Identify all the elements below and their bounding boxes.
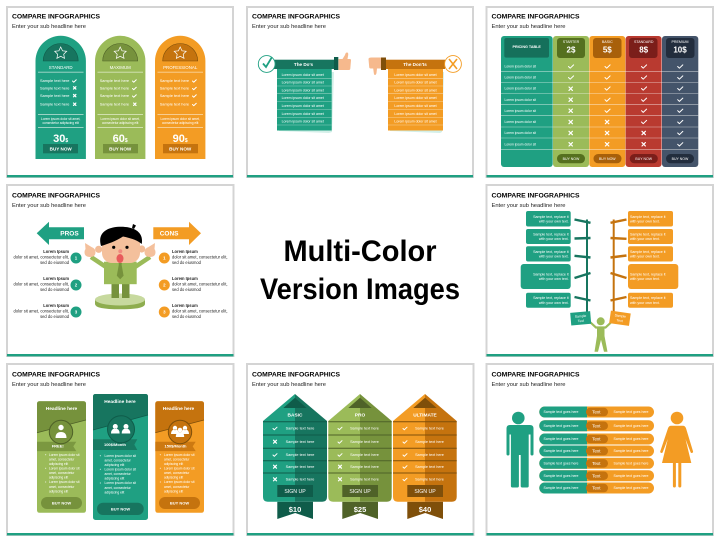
left text boxes: with your own text. bbox=[539, 277, 569, 281]
card: monthly group: adipiscing elit bbox=[164, 462, 183, 466]
subtitle: Enter your sub headline here bbox=[492, 203, 566, 209]
plan: standard bbox=[36, 36, 86, 159]
pros list: sed do eiusmod bbox=[40, 287, 70, 292]
left text boxes: Sample text, replace it bbox=[533, 272, 569, 276]
do's list: Lorem ipsum dolor sit amet bbox=[282, 112, 324, 116]
icon: man bbox=[507, 412, 534, 488]
column: basic: 5$ bbox=[603, 46, 612, 54]
card: monthly team: Lorem ipsum dolor sit bbox=[104, 481, 136, 485]
plan: pro: PRO bbox=[355, 412, 365, 418]
icon: cross circle bbox=[445, 56, 461, 72]
center caption bbox=[260, 235, 460, 306]
cons list bbox=[159, 249, 228, 319]
plan: basic bbox=[263, 394, 327, 519]
plan: professional: consectetur adipiscing elit bbox=[162, 121, 199, 125]
plan: maximum: Lorem ipsum dolor sit amet, bbox=[101, 117, 140, 121]
plan: standard: Sample text here bbox=[40, 93, 69, 98]
plan: professional: Sample text here bbox=[160, 102, 189, 107]
plan: basic: Sample text here bbox=[286, 478, 314, 482]
pros list: dolor sit amet, consectetur elit, bbox=[13, 282, 69, 287]
card: monthly group bbox=[155, 401, 204, 513]
card: free: BUY NOW bbox=[52, 500, 71, 506]
card: monthly group: 150$/Month bbox=[164, 444, 187, 449]
pros list: dolor sit amet, consectetur elit, bbox=[13, 255, 69, 260]
cons list: sed do eiusmod bbox=[172, 260, 202, 265]
comparison bars: Text bbox=[592, 486, 601, 491]
plan: standard: 30$ bbox=[53, 133, 68, 145]
left text boxes: Sample text, replace it bbox=[533, 232, 569, 236]
column: labels: Lorem ipsum dolor sit bbox=[504, 86, 536, 90]
left signpost bbox=[574, 220, 590, 314]
card: monthly team: adipiscing elit bbox=[104, 476, 124, 480]
center caption: Multi-Color bbox=[284, 235, 437, 268]
column: premium: BUY NOW bbox=[672, 157, 689, 161]
card: monthly group: BUY NOW bbox=[170, 500, 189, 506]
panel: arched pricing plans bbox=[7, 7, 233, 177]
card: monthly group: Lorem ipsum dolor sit bbox=[164, 480, 195, 484]
column: premium: 10$ bbox=[673, 46, 687, 54]
comparison bars: Sample text goes here bbox=[543, 424, 579, 428]
column: labels: Lorem ipsum dolor sit bbox=[504, 109, 536, 113]
plan: professional: PROFESSIONAL bbox=[163, 65, 198, 70]
column: labels: Lorem ipsum dolor sit bbox=[504, 142, 536, 146]
pros list: Lorem Ipsum bbox=[43, 303, 69, 308]
comparison bars: Sample text goes here bbox=[613, 437, 649, 441]
card: monthly team: Lorem ipsum dolor sit bbox=[104, 454, 136, 458]
plan: standard: BUY NOW bbox=[50, 146, 72, 151]
plan: ultimate bbox=[393, 394, 457, 519]
comparison bars: Text bbox=[592, 410, 601, 415]
center caption: Version Images bbox=[260, 273, 460, 306]
do's list: Lorem ipsum dolor sit amet bbox=[282, 96, 324, 100]
cons list: 3 bbox=[163, 310, 166, 315]
plan: standard: Sample text here bbox=[40, 78, 69, 83]
pros list: 1 bbox=[75, 256, 78, 261]
card: monthly team: BUY NOW bbox=[111, 506, 130, 511]
plan: maximum: consectetur adipiscing elit bbox=[102, 121, 139, 125]
plan: standard: STANDARD bbox=[49, 65, 73, 70]
left text boxes: Sample text, replace it bbox=[533, 250, 569, 254]
plan: professional: 90$ bbox=[173, 133, 188, 145]
plan: professional: Sample text here bbox=[160, 78, 189, 83]
plan: basic: Sample text here bbox=[286, 440, 314, 444]
plan: standard: Sample text here bbox=[40, 86, 69, 90]
comparison bars: Sample text goes here bbox=[613, 424, 649, 428]
pros list: sed do eiusmod bbox=[40, 314, 70, 319]
card: monthly team: Lorem ipsum dolor sit bbox=[104, 467, 136, 471]
column: premium bbox=[662, 36, 698, 167]
card: monthly group: adipiscing elit bbox=[164, 475, 183, 479]
card: monthly team: adipiscing elit bbox=[104, 490, 124, 494]
left text boxes: with your own text. bbox=[539, 301, 569, 305]
card: free: amet, consectetur bbox=[49, 457, 75, 461]
cons list: 2 bbox=[163, 283, 166, 288]
right sign: Text bbox=[616, 318, 623, 323]
column: basic: BASIC bbox=[602, 40, 613, 44]
card: free: Lorem ipsum dolor sit bbox=[49, 480, 80, 484]
cons list: sed do eiusmod bbox=[172, 314, 202, 319]
do's list: Lorem ipsum dolor sit amet bbox=[282, 81, 324, 85]
column: labels bbox=[501, 36, 553, 167]
cons list: dolor sit amet, consectetur elit, bbox=[172, 309, 228, 314]
column: standard: STANDARD bbox=[634, 40, 654, 44]
plan: ultimate: Sample text here bbox=[415, 478, 444, 482]
card: monthly group: Lorem ipsum dolor sit bbox=[164, 453, 195, 457]
panel: do's and don'ts bbox=[247, 7, 473, 177]
subtitle: Enter your sub headline here bbox=[492, 382, 566, 388]
don'ts list: Lorem ipsum dolor sit amet bbox=[394, 96, 437, 100]
plan: basic: Sample text here bbox=[286, 453, 314, 457]
comparison bars: Sample text goes here bbox=[613, 410, 649, 414]
cartoon person on podium bbox=[84, 224, 156, 309]
plan: maximum: Sample text here bbox=[100, 93, 129, 98]
plan: professional: BUY NOW bbox=[169, 146, 192, 151]
pros list: 3 bbox=[75, 310, 78, 315]
title: COMPARE INFOGRAPHICS bbox=[492, 371, 580, 378]
column: starter: 2$ bbox=[567, 46, 576, 54]
plan: basic: SIGN UP bbox=[284, 489, 306, 495]
comparison bars: Sample text goes here bbox=[613, 486, 649, 490]
card: monthly team bbox=[93, 394, 148, 520]
plan: maximum: 60$ bbox=[113, 133, 128, 145]
plan: maximum: Sample text here bbox=[100, 102, 129, 107]
plan: ultimate: Sample text here bbox=[415, 453, 444, 457]
column: standard bbox=[626, 36, 662, 167]
right text boxes: Sample text, replace it bbox=[630, 272, 666, 276]
subtitle: Enter your sub headline here bbox=[12, 203, 86, 209]
arrow: pros bbox=[37, 222, 84, 245]
title: COMPARE INFOGRAPHICS bbox=[12, 192, 101, 199]
right signpost bbox=[610, 220, 626, 314]
plan: pro: $25 bbox=[354, 505, 366, 514]
icon: thumb up bbox=[338, 52, 351, 70]
comparison bars: Sample text goes here bbox=[543, 486, 579, 490]
column: starter: BUY NOW bbox=[563, 157, 580, 161]
don'ts list: Lorem ipsum dolor sit amet bbox=[394, 120, 437, 124]
plan: maximum: Sample text here bbox=[100, 86, 129, 90]
column: labels: Lorem ipsum dolor sit bbox=[504, 131, 536, 135]
do's list bbox=[258, 52, 351, 133]
plan: ultimate: Sample text here bbox=[415, 427, 444, 431]
plan: professional: Lorem ipsum dolor sit amet, bbox=[161, 117, 200, 121]
icon: check circle bbox=[258, 56, 275, 72]
do's list: The Do's bbox=[294, 62, 314, 67]
column: basic: BUY NOW bbox=[599, 157, 616, 161]
panel: signpost comparison bbox=[486, 185, 713, 356]
panel: headline plan cards bbox=[7, 364, 234, 535]
right text boxes: with your own text. bbox=[630, 277, 660, 281]
comparison bars: Sample text goes here bbox=[543, 437, 579, 441]
pros list: sed do eiusmod bbox=[40, 260, 70, 265]
card: free: FREE! bbox=[52, 444, 64, 449]
comparison bars: Text bbox=[592, 473, 601, 478]
do's list: Lorem ipsum dolor sit amet bbox=[282, 73, 324, 77]
cons list: Lorem Ipsum bbox=[172, 303, 198, 308]
card: monthly group: Lorem ipsum dolor sit bbox=[164, 466, 195, 470]
title: COMPARE INFOGRAPHICS bbox=[492, 192, 580, 199]
subtitle: Enter your sub headline here bbox=[252, 382, 326, 388]
right text boxes bbox=[628, 211, 678, 308]
comparison bars: Sample text goes here bbox=[613, 474, 649, 478]
don'ts list: Lorem ipsum dolor sit amet bbox=[394, 81, 437, 85]
subtitle: Enter your sub headline here bbox=[12, 382, 86, 388]
plan: basic: BASIC bbox=[288, 412, 303, 418]
plan: ultimate: $40 bbox=[419, 505, 431, 514]
column: basic bbox=[589, 36, 625, 167]
right text boxes: Sample text, replace it bbox=[630, 215, 666, 219]
column: starter bbox=[553, 36, 589, 167]
panel: house-shaped plans bbox=[247, 364, 474, 535]
card: free: amet, consectetur bbox=[49, 485, 75, 489]
right text boxes: Sample text, replace it bbox=[630, 250, 666, 254]
plan: ultimate: ULTIMATE bbox=[413, 412, 438, 418]
card: monthly group: amet, consectetur bbox=[164, 457, 190, 461]
pros list: Lorem Ipsum bbox=[43, 276, 69, 281]
card: monthly team: adipiscing elit bbox=[104, 463, 124, 467]
plan: pro: Sample text here bbox=[350, 465, 379, 469]
card: monthly team: 100$/Month bbox=[104, 442, 127, 447]
plan: maximum: BUY NOW bbox=[109, 146, 132, 151]
card: free: adipiscing elit bbox=[49, 462, 68, 466]
don'ts list: Lorem ipsum dolor sit amet bbox=[394, 104, 437, 108]
left text boxes: Sample text, replace it bbox=[533, 296, 569, 300]
do's list: Lorem ipsum dolor sit amet bbox=[282, 104, 324, 108]
plan: ultimate: Sample text here bbox=[415, 440, 444, 444]
plan: pro: Sample text here bbox=[350, 453, 379, 457]
card: monthly team: amet, consectetur bbox=[104, 458, 132, 462]
do's list: Lorem ipsum dolor sit amet bbox=[282, 120, 324, 124]
left sign: Sample bbox=[575, 314, 587, 319]
card: free: adipiscing elit bbox=[49, 489, 68, 493]
comparison bars: Text bbox=[592, 461, 601, 466]
don'ts list: The Don'ts bbox=[403, 62, 427, 67]
left text boxes: with your own text. bbox=[539, 255, 569, 259]
card: free: Lorem ipsum dolor sit bbox=[49, 453, 80, 457]
left sign: Text bbox=[578, 319, 584, 323]
column: premium: PREMIUM bbox=[672, 40, 688, 44]
plan: ultimate: SIGN UP bbox=[414, 489, 436, 495]
card: monthly group: adipiscing elit bbox=[164, 489, 183, 493]
plan: basic: Sample text here bbox=[286, 427, 314, 431]
do's list: Lorem ipsum dolor sit amet bbox=[282, 88, 324, 92]
cons list: sed do eiusmod bbox=[172, 287, 202, 292]
cons list: 1 bbox=[163, 256, 166, 261]
plan: professional: Sample text here bbox=[160, 93, 189, 98]
left text boxes: with your own text. bbox=[539, 220, 569, 224]
don'ts list: Lorem ipsum dolor sit amet bbox=[394, 73, 437, 77]
plan: maximum: MAXIMUM bbox=[110, 65, 131, 70]
title: COMPARE INFOGRAPHICS bbox=[252, 13, 341, 20]
card: free: adipiscing elit bbox=[49, 475, 68, 479]
don'ts list: Lorem ipsum dolor sit amet bbox=[394, 88, 437, 92]
card: free bbox=[37, 401, 86, 513]
card: free: Headline here bbox=[46, 406, 78, 412]
title: COMPARE INFOGRAPHICS bbox=[12, 13, 101, 20]
cons list: dolor sit amet, consectetur elit, bbox=[172, 282, 228, 287]
figure holding signs bbox=[570, 311, 631, 352]
panel: man vs woman bbox=[486, 364, 713, 535]
plan: standard: Lorem ipsum dolor sit amet, bbox=[41, 117, 80, 121]
column: labels: Lorem ipsum dolor sit bbox=[504, 76, 536, 80]
comparison bars: Sample text goes here bbox=[543, 410, 579, 414]
column: starter: STARTER bbox=[563, 40, 580, 44]
card: monthly group: Headline here bbox=[163, 406, 195, 412]
arrow: cons bbox=[153, 222, 201, 245]
comparison bars: Text bbox=[592, 437, 601, 442]
column: labels: Lorem ipsum dolor sit bbox=[504, 64, 536, 68]
don'ts list bbox=[368, 56, 461, 133]
panel: pros and cons bbox=[7, 185, 234, 356]
plan: basic: Sample text here bbox=[286, 465, 314, 469]
comparison bars bbox=[539, 406, 654, 494]
subtitle: Enter your sub headline here bbox=[12, 24, 86, 30]
comparison bars: Sample text goes here bbox=[613, 462, 649, 466]
left text boxes: with your own text. bbox=[539, 237, 569, 241]
cons list: dolor sit amet, consectetur elit, bbox=[172, 255, 228, 260]
plan: maximum: Sample text here bbox=[100, 78, 129, 83]
comparison bars: Text bbox=[592, 423, 601, 428]
plan: pro: Sample text here bbox=[350, 478, 379, 482]
column: standard: 8$ bbox=[639, 46, 649, 54]
plan: ultimate: Sample text here bbox=[415, 465, 444, 469]
card: monthly team: Headline here bbox=[104, 399, 136, 405]
right text boxes: with your own text. bbox=[630, 220, 660, 224]
plan: standard: Sample text here bbox=[40, 102, 69, 107]
plan: professional bbox=[155, 36, 205, 159]
plan: standard: consectetur adipiscing elit bbox=[42, 121, 79, 125]
left sign bbox=[570, 311, 591, 325]
column: labels: Lorem ipsum dolor sit bbox=[504, 98, 536, 102]
plan: pro bbox=[328, 394, 392, 519]
right text boxes: Sample text, replace it bbox=[630, 232, 666, 236]
card: free: Lorem ipsum dolor sit bbox=[49, 466, 80, 470]
column: labels: Lorem ipsum dolor sit bbox=[504, 120, 536, 124]
right sign: Sample bbox=[614, 313, 626, 319]
pros list: Lorem Ipsum bbox=[43, 249, 69, 254]
subtitle: Enter your sub headline here bbox=[252, 24, 326, 30]
pros list bbox=[13, 249, 82, 319]
right text boxes: Sample text, replace it bbox=[630, 296, 666, 300]
plan: pro: Sample text here bbox=[350, 440, 379, 444]
title: COMPARE INFOGRAPHICS bbox=[492, 13, 580, 20]
card: monthly group: amet, consectetur bbox=[164, 485, 190, 489]
cons list: Lorem Ipsum bbox=[172, 249, 198, 254]
pros list: 2 bbox=[75, 283, 78, 288]
comparison bars: Text bbox=[592, 449, 601, 454]
left text boxes bbox=[521, 211, 571, 308]
right text boxes: with your own text. bbox=[630, 237, 660, 241]
pros list: dolor sit amet, consectetur elit, bbox=[13, 309, 69, 314]
arrow: pros: PROS bbox=[60, 231, 79, 238]
plan: basic: $10 bbox=[289, 505, 301, 514]
icon: thumb down bbox=[368, 58, 381, 75]
comparison bars: Sample text goes here bbox=[613, 449, 649, 453]
don'ts list: Lorem ipsum dolor sit amet bbox=[394, 112, 437, 116]
left text boxes: Sample text, replace it bbox=[533, 215, 569, 219]
right text boxes: with your own text. bbox=[630, 301, 660, 305]
comparison bars: Sample text goes here bbox=[543, 449, 579, 453]
title: COMPARE INFOGRAPHICS bbox=[12, 371, 101, 378]
plan: maximum bbox=[95, 36, 145, 159]
comparison bars: Sample text goes here bbox=[543, 474, 579, 478]
panel: pricing table bbox=[486, 7, 713, 177]
cons list: Lorem Ipsum bbox=[172, 276, 198, 281]
plan: pro: Sample text here bbox=[350, 427, 379, 431]
right sign bbox=[609, 311, 631, 326]
comparison bars: Sample text goes here bbox=[543, 462, 579, 466]
plan: professional: Sample text here bbox=[160, 86, 189, 90]
subtitle: Enter your sub headline here bbox=[492, 24, 566, 30]
column: labels: PRICING TABLE bbox=[512, 45, 541, 49]
right text boxes: with your own text. bbox=[630, 255, 660, 259]
title: COMPARE INFOGRAPHICS bbox=[252, 371, 341, 378]
card: free: amet, consectetur bbox=[49, 471, 75, 475]
card: monthly team: amet, consectetur bbox=[104, 472, 132, 476]
arrow: cons: CONS bbox=[160, 231, 179, 238]
icon: woman bbox=[660, 412, 693, 488]
column: standard: BUY NOW bbox=[635, 157, 653, 161]
card: monthly group: amet, consectetur bbox=[164, 471, 190, 475]
card: monthly team: amet, consectetur bbox=[104, 486, 132, 490]
plan: pro: SIGN UP bbox=[349, 489, 371, 495]
